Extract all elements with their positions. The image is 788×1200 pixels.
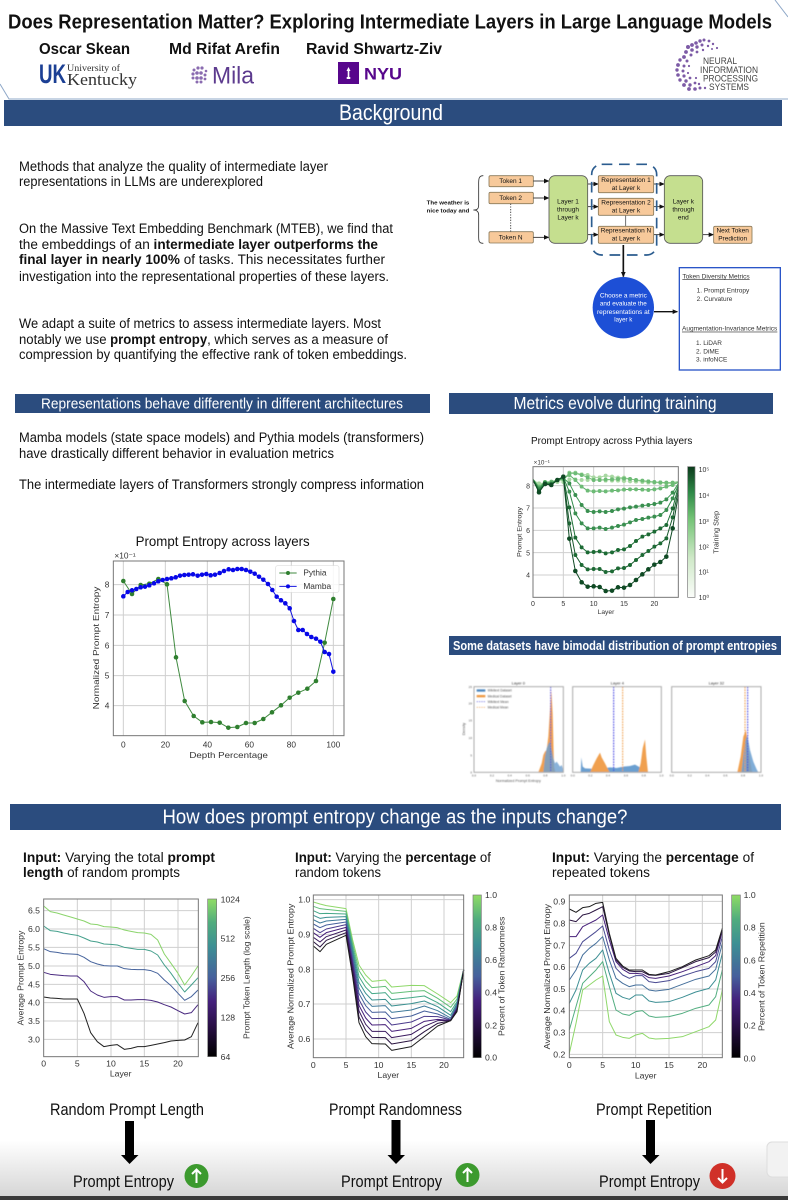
panel: layer 0: 10 [469, 736, 472, 740]
logo: Neural Information Processing Systems: NEURAL [703, 56, 737, 66]
axis labels: 0.4 [553, 1006, 566, 1016]
series: Mamba [123, 569, 333, 672]
panel: layer 32 [670, 680, 763, 778]
axis labels: 6 [526, 528, 530, 535]
panel: layer 0: 25 [469, 685, 472, 689]
logo: Neural Information Processing Systems [675, 38, 758, 92]
axis labels: 40 [203, 740, 212, 750]
panel: layer 4: 1.0 [659, 774, 664, 778]
panel: layer 0: Medical Dataset [488, 694, 512, 698]
diagram: intermediate layer pipeline [427, 164, 780, 370]
logo: University of Kentucky: UK [39, 59, 66, 89]
axis labels: Prompt Entropy [517, 506, 524, 557]
metric circle: layer k [614, 317, 633, 324]
axis labels: 7 [526, 506, 530, 513]
panel: layer 32: 0.4 [705, 774, 710, 778]
metric circle: Choose a metric [600, 293, 647, 300]
panel: layer 0: Layer 0 [512, 680, 526, 685]
input description: prompt length [23, 850, 216, 880]
panel: layer 0: Wikitext Mean [488, 700, 509, 704]
axis labels: 0 [567, 1060, 572, 1070]
text block: background description: the embeddings of an intermediate layer outperforms the [19, 237, 378, 252]
axis labels: Layer [598, 609, 615, 616]
panel: layer 0: Medical Mean [488, 706, 509, 710]
outcome: prompt repetition: Prompt Entropy [599, 1172, 700, 1191]
layer 1 through layer k [549, 176, 588, 243]
prompt text with brace [427, 176, 483, 243]
arrows into layer block [533, 181, 713, 237]
panel: layer 0: 5 [470, 753, 472, 757]
colorbar: prompt token length: 1024 [221, 894, 240, 904]
representation boxes: Representation N [601, 228, 652, 235]
axis labels: 4.5 [28, 979, 40, 989]
logo: NYU [338, 62, 402, 84]
line chart: random prompt length [16, 894, 251, 1078]
colorbar: token randomness: 0.4 [485, 988, 497, 998]
token boxes: Token N [499, 234, 523, 241]
metric circle: representations at [597, 309, 650, 316]
logo: Neural Information Processing Systems: INFORMATION [700, 65, 758, 75]
colorbar: prompt token length [208, 894, 251, 1062]
heading: Metrics evolve during training [449, 393, 773, 414]
text block: architectures: have drastically different behavior in evaluation metrics [19, 446, 334, 461]
metrics list box [679, 268, 780, 370]
axis labels: 6 [105, 640, 110, 650]
layer k through end: Layer k [673, 198, 695, 205]
axis labels: Layer [378, 1070, 399, 1080]
colorbar: prompt token length: 256 [221, 973, 235, 983]
axis labels: 60 [245, 740, 254, 750]
curves [44, 906, 198, 1049]
axis labels: 15 [407, 1060, 416, 1070]
axis labels [542, 896, 707, 1081]
axis labels: 10 [374, 1060, 384, 1070]
text block: architectures [19, 430, 424, 492]
metrics list box: 2. Curvature [697, 296, 733, 303]
prompt text with brace: nice today and [427, 209, 470, 215]
axis labels: Depth Percentage [189, 750, 268, 760]
text block: background description: representations in LLMs are underexplored [19, 174, 263, 189]
prompt text with brace: The weather is [427, 201, 469, 207]
series: Pythia [123, 579, 333, 728]
axis labels: 0.9 [553, 896, 566, 906]
axis labels: 4.0 [28, 998, 40, 1008]
text block: background description: investigation into the representational properties of these layers. [19, 269, 389, 284]
panel: layer 0: Wikitext Dataset [488, 689, 512, 693]
outcome: prompt randomness: Prompt Entropy [341, 1172, 442, 1191]
colorbar: token repetition: 0.4 [744, 988, 756, 998]
colorbar: token randomness: 0.2 [485, 1020, 497, 1030]
metrics list box: 3. infoNCE [696, 356, 728, 363]
representation boxes: at Layer k [612, 208, 641, 215]
axis labels: Average Prompt Entropy [16, 930, 26, 1025]
arrow to metrics list [654, 310, 677, 314]
icon: red down arrow [710, 1163, 736, 1189]
line chart: prompt randomness [286, 890, 507, 1080]
logo: Mila: Mila [212, 62, 255, 90]
axis labels: 0.8 [298, 964, 311, 974]
text block: background description: On the Massive Text Embedding Benchmark (MTEB), we find that [19, 221, 393, 236]
axis labels: 5 [600, 1060, 605, 1070]
axis labels: 4 [526, 573, 530, 580]
panel: layer 32: 0.6 [723, 774, 728, 778]
axis labels [91, 550, 341, 760]
axis labels: 80 [287, 740, 296, 750]
heading: How does prompt entropy change [10, 804, 781, 830]
text block: background description: Methods that analyze the quality of intermediate layer [19, 159, 329, 174]
panel: layer 0: Normalized Prompt Entropy [496, 779, 541, 783]
axis labels [517, 459, 658, 616]
axis labels: 20 [698, 1060, 707, 1070]
token boxes [489, 176, 533, 243]
axis labels: 0.7 [553, 940, 566, 950]
outcome: prompt repetition: Prompt Repetition [596, 1100, 712, 1119]
input description: randomness: Input: Varying the percentage of [295, 850, 491, 865]
axis labels: 0.7 [298, 999, 311, 1009]
input description: randomness: random tokens [295, 865, 381, 880]
axis labels: 5 [105, 671, 110, 681]
axis labels: 0.5 [553, 984, 566, 994]
axis labels: Layer [110, 1068, 132, 1078]
colorbar: prompt token length: 64 [221, 1052, 230, 1062]
representation boxes [598, 176, 654, 243]
logo: NYU: NYU [364, 64, 402, 84]
panel: layer 32: 0.0 [670, 774, 674, 778]
metrics list box: 1. Prompt Entropy [697, 288, 750, 295]
token boxes: Token 1 [499, 178, 522, 185]
panel: layer 4: 0.0 [571, 774, 575, 778]
axis labels: 15 [620, 601, 628, 608]
axis labels: Normalized Prompt Entropy [91, 586, 101, 709]
axis labels: 10 [106, 1059, 116, 1069]
author: Ravid Shwartz-Ziv: Ravid Shwartz-Ziv [306, 41, 442, 58]
header [8, 12, 772, 92]
axis labels: 7 [105, 610, 110, 620]
axis labels: 10 [631, 1060, 641, 1070]
training step colorbar: 10⁵ [699, 467, 709, 474]
text block: architectures: The intermediate layers of Transformers strongly compress information [19, 477, 424, 492]
arrow to metric [621, 245, 626, 277]
input description: prompt length: Input: Varying the total prompt [23, 850, 216, 865]
curves [569, 902, 722, 1053]
axis labels: 0.9 [298, 929, 311, 939]
layer k through end [664, 176, 703, 243]
colorbar: token repetition: 0.6 [744, 955, 756, 965]
metrics list box: 1. LiDAR [696, 340, 722, 347]
icon: green up arrow [184, 1164, 208, 1188]
logo: University of Kentucky: University of [67, 63, 120, 73]
line chart: Prompt Entropy across Pythia layers [517, 436, 720, 616]
heading: Representations behave differently: Representations behave differently in different architectures [41, 396, 403, 412]
logo: University of Kentucky [39, 59, 138, 89]
axis labels: 5 [526, 550, 530, 557]
training step colorbar: Training Step [713, 511, 720, 554]
representation boxes: Representation 1 [601, 177, 651, 184]
axis labels: 0.6 [553, 962, 566, 972]
histograms: prompt entropy by layer [462, 680, 763, 783]
text block: architectures: Mamba models (state space models) and Pythia models (transformers) [19, 430, 424, 445]
panel: layer 32: Layer 32 [709, 680, 725, 685]
axis labels: 20 [439, 1060, 449, 1070]
axis labels: 0.8 [553, 918, 566, 928]
panel: layer 4: 0.6 [624, 774, 628, 778]
axis labels: 5 [344, 1060, 349, 1070]
training step colorbar: 10⁰ [699, 594, 709, 602]
axis labels: 100 [326, 740, 341, 750]
outcome: random prompt length [50, 1100, 208, 1191]
colorbar: token repetition: 1.0 [744, 890, 756, 900]
heading: Background: Background [339, 100, 443, 125]
axis labels: 8 [105, 580, 110, 590]
metrics list box: 2. DiME [696, 348, 720, 355]
layer 1 through layer k: Layer 1 [557, 198, 579, 205]
colorbar: token randomness [473, 890, 507, 1063]
arrow down [388, 1120, 405, 1164]
panel: layer 0: 20 [469, 702, 472, 706]
axis labels: 0.3 [553, 1028, 566, 1038]
metric circle: and evaluate the [600, 301, 647, 308]
author: Md Rifat Arefin: Md Rifat Arefin [169, 41, 280, 58]
axis labels: 0 [41, 1059, 46, 1069]
heading: Metrics evolve during training: Metrics evolve during training [514, 393, 716, 413]
training step colorbar: 10⁴ [699, 493, 709, 500]
colorbar: token randomness: 1.0 [485, 890, 497, 900]
outcome: prompt randomness: Prompt Randomness [329, 1100, 462, 1119]
panel: layer 32: 0.8 [741, 774, 745, 778]
logo: Neural Information Processing Systems: PROCESSING [703, 74, 758, 84]
input description: prompt length: length of random prompts [23, 865, 180, 880]
colorbar: token randomness: Percent of Token Randomness [497, 916, 507, 1036]
axis labels: 3.5 [28, 1016, 40, 1026]
next token prediction: Prediction [718, 236, 747, 243]
axis labels [16, 906, 183, 1078]
axis labels: 20 [161, 740, 170, 750]
colorbar: token randomness: 0.0 [485, 1053, 497, 1063]
axis labels: Layer [635, 1071, 657, 1081]
legend [276, 566, 339, 592]
axis labels: 3.0 [28, 1034, 40, 1044]
logo: University of Kentucky: Kentucky [67, 70, 138, 89]
panel: layer 32: 1.0 [759, 774, 763, 778]
training step colorbar: 10² [699, 544, 709, 551]
token boxes: Token 2 [499, 195, 522, 202]
axis labels: ×10⁻¹ [114, 550, 136, 560]
training step colorbar [688, 467, 720, 602]
logo: Neural Information Processing Systems: SYSTEMS [709, 82, 749, 92]
next token prediction [714, 226, 752, 243]
chart title: Prompt Entropy across Pythia layers [531, 436, 692, 447]
layer k through end: through [672, 206, 695, 213]
colorbar: token repetition: 0.8 [744, 923, 756, 933]
panel: layer 4: 0.8 [642, 774, 646, 778]
axis labels: 1.0 [298, 895, 311, 905]
outcome: random prompt length: Prompt Entropy [73, 1172, 174, 1191]
axis labels: 15 [140, 1059, 149, 1069]
panel: layer 0: 1.0 [561, 774, 566, 778]
icon: green up arrow [456, 1163, 480, 1187]
panel: layer 0: 0.2 [490, 774, 494, 778]
axis labels: 5 [561, 601, 565, 608]
colorbar: token repetition: 0.2 [744, 1021, 756, 1031]
colorbar: token repetition [732, 890, 766, 1063]
axis labels: 20 [650, 601, 658, 608]
panel: layer 0: 15 [469, 719, 472, 723]
panel: layer 0: 0.0 [472, 774, 476, 778]
heading: Background [4, 100, 782, 126]
representation boxes: at Layer k [612, 185, 641, 192]
representation boxes: at Layer k [612, 236, 641, 243]
axis labels: 15 [664, 1060, 674, 1070]
colorbar: token repetition: Percent of Token Repetition [756, 922, 766, 1031]
axis labels: 4 [105, 701, 110, 711]
next token prediction: Next Token [716, 228, 749, 235]
axis labels: ×10⁻¹ [534, 459, 550, 466]
axis labels: 0 [311, 1060, 316, 1070]
outcome: prompt repetition [596, 1100, 736, 1191]
axis labels: 6.5 [28, 906, 40, 916]
axis labels: Average Normalized Prompt Entropy [286, 903, 296, 1049]
axis labels: 0.2 [553, 1049, 566, 1059]
curves by training step [533, 473, 678, 591]
panel: layer 0: 0.6 [526, 774, 530, 778]
colorbar: prompt token length: 512 [221, 934, 235, 944]
axis labels: Average Normalized Prompt Entropy [542, 903, 552, 1049]
axis labels: 0 [531, 601, 535, 608]
axis labels: 0 [121, 740, 126, 750]
panel: layer 0: 0.4 [508, 774, 512, 778]
text block: background description [19, 159, 407, 362]
legend: Mamba [303, 581, 331, 591]
panel: layer 0: 0.8 [543, 774, 548, 778]
outcome: random prompt length: Random Prompt Length [50, 1100, 204, 1119]
input description: randomness [295, 850, 491, 880]
arrow down [642, 1120, 660, 1164]
dashed selection outline [592, 164, 657, 255]
axis labels: 20 [173, 1059, 183, 1069]
outcome: prompt randomness [329, 1100, 480, 1191]
colorbar: token randomness: 0.6 [485, 955, 497, 965]
line chart: Prompt Entropy across layers [91, 533, 344, 760]
colorbar: prompt token length: 128 [221, 1012, 235, 1022]
panel: layer 0: 0 [470, 770, 472, 774]
metrics list box: Augmentation-Invariance Metrics [682, 326, 778, 333]
colorbar: prompt token length: Prompt Token Length (log scale) [241, 916, 251, 1039]
axis labels: 10 [590, 601, 598, 608]
heading: How does prompt entropy change: How does prompt entropy change as the inputs change? [162, 806, 628, 828]
chart title: Prompt Entropy across layers [136, 533, 310, 549]
legend: Pythia [303, 568, 327, 578]
axis labels: 5.5 [28, 942, 40, 952]
axis labels: 5 [75, 1059, 80, 1069]
text block: background description: final layer in nearly 100% of tasks. This necessitates further [19, 252, 386, 267]
panel: layer 32: 0.2 [688, 774, 692, 778]
colorbar: token randomness: 0.8 [485, 923, 497, 933]
panel: layer 4 [571, 680, 664, 778]
panel: layer 4: Layer 4 [611, 680, 625, 685]
metric circle [593, 277, 654, 338]
line chart: prompt repetition [542, 890, 766, 1081]
training step colorbar: 10¹ [699, 570, 709, 577]
layer 1 through layer k: Layer k [557, 215, 579, 222]
axis labels: 5.0 [28, 961, 40, 971]
axis labels [286, 895, 449, 1080]
panel: layer 0: Density [462, 723, 466, 735]
text block: background description: notably we use prompt entropy, which serves as a measure of [19, 332, 388, 347]
colorbar: token repetition: 0.0 [744, 1053, 756, 1063]
curves [313, 902, 464, 1050]
axis labels: 0.6 [298, 1034, 311, 1044]
layer 1 through layer k: through [557, 206, 579, 213]
axis labels: 8 [526, 483, 530, 490]
logo: Mila [191, 62, 255, 90]
panel: layer 4: 0.2 [588, 774, 593, 778]
panel: layer 0 [462, 680, 566, 783]
input description: repetition [552, 850, 754, 880]
text block: background description: We adapt a suite of metrics to assess intermediate layers. Most [19, 316, 381, 331]
author: Oscar Skean: Oscar Skean [39, 41, 130, 58]
text block: background description: compression by quantifying the effective rank of token embeddings. [19, 347, 407, 362]
layer k through end: end [678, 215, 689, 222]
metrics list box: Token Diversity Metrics [682, 273, 750, 280]
representation boxes: Representation 2 [601, 200, 651, 207]
axis labels: 6.0 [28, 924, 40, 934]
training step colorbar: 10³ [699, 519, 709, 526]
input description: repetition: Input: Varying the percentage of [552, 850, 754, 865]
panel: layer 4: 0.4 [606, 774, 610, 778]
arrow down [121, 1121, 138, 1164]
input description: repetition: repeated tokens [552, 865, 650, 880]
